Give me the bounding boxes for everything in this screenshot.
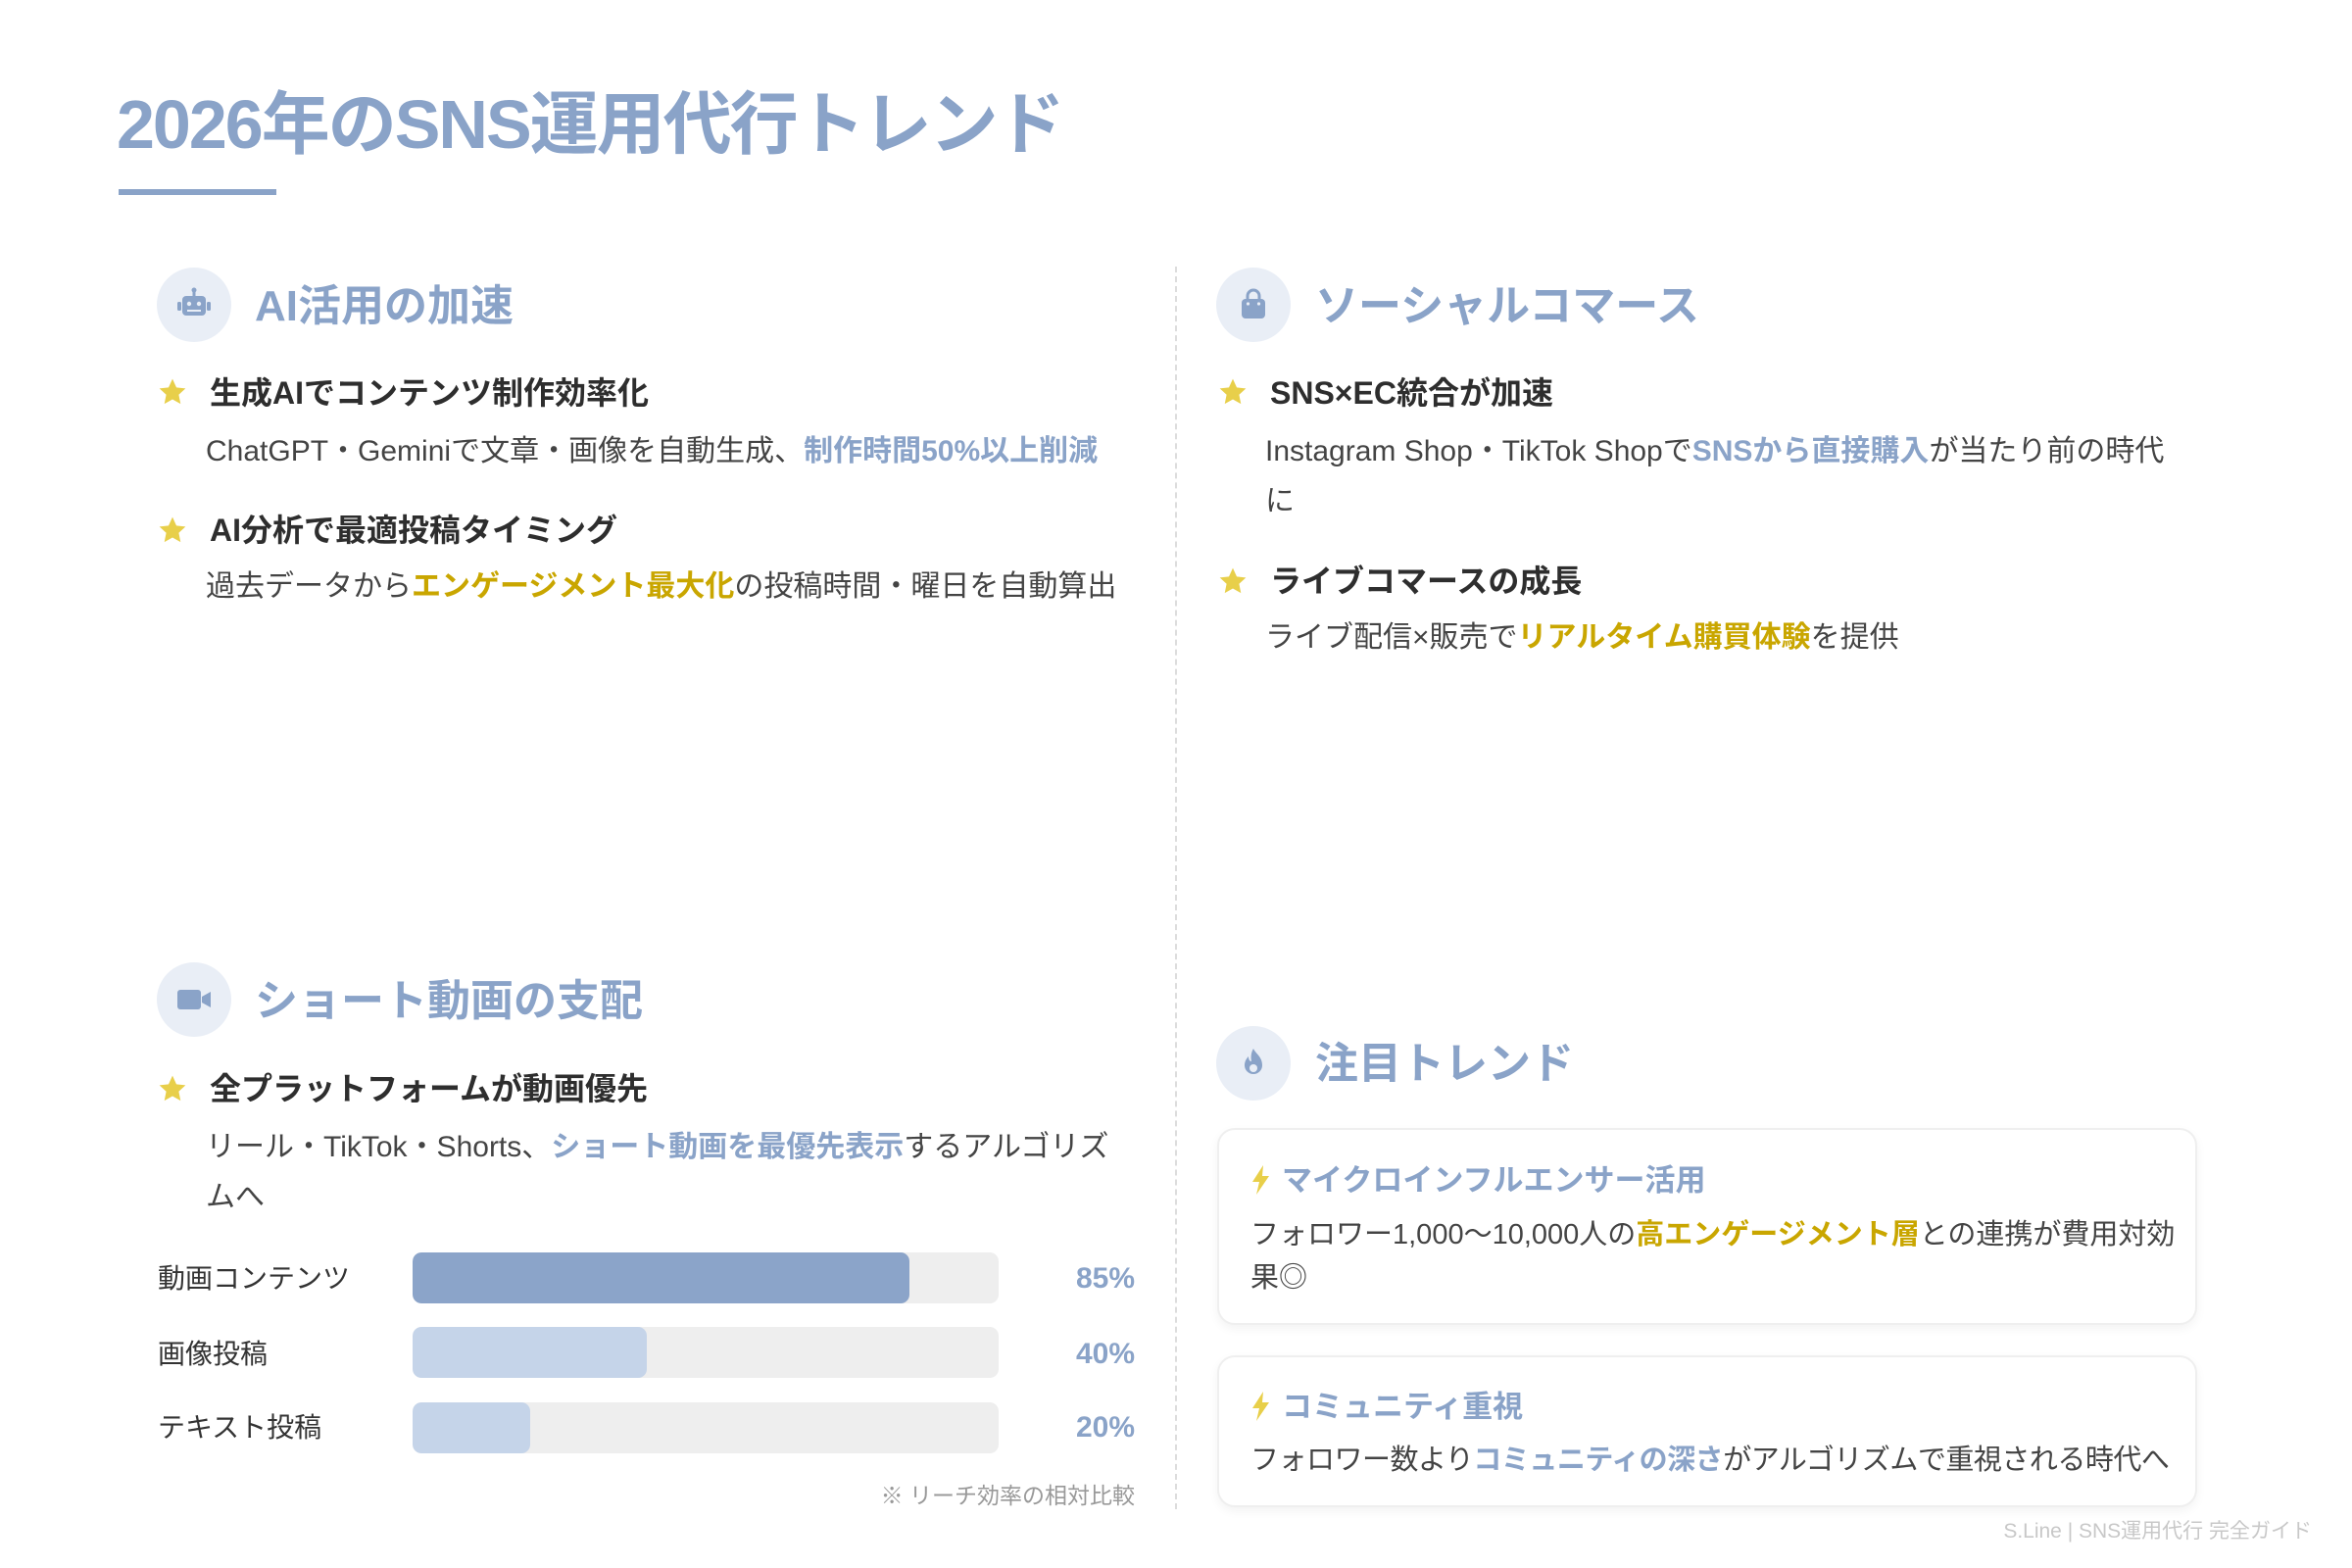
icon: star	[159, 1076, 186, 1102]
panel: trends	[1216, 1026, 1574, 1101]
icon: video camera	[157, 962, 231, 1037]
card desc: 果◎	[1250, 1262, 1307, 1294]
desc	[1265, 435, 2164, 517]
desc	[206, 1131, 1108, 1213]
bar chart: 20%	[1076, 1411, 1135, 1444]
title: 2026年のSNS運用代行トレンド	[117, 86, 1063, 163]
card: micro influencer	[1217, 1128, 2197, 1325]
heading: AI活用の加速	[255, 282, 514, 330]
bar chart: テキスト投稿	[158, 1412, 321, 1443]
bar chart: 85%	[1076, 1262, 1135, 1295]
item title: 生成AIでコンテンツ制作効率化	[210, 375, 649, 411]
bar chart: 40%	[1076, 1338, 1135, 1370]
bar chart: 動画コンテンツ	[158, 1263, 350, 1294]
icon: bag	[1216, 268, 1291, 342]
heading: ソーシャルコマース	[1315, 282, 1699, 330]
heading: 注目トレンド	[1315, 1040, 1574, 1088]
card desc: フォロワー1,000〜10,000人の高エンゲージメント層との連携が費用対効	[1250, 1219, 2175, 1250]
item title: AI分析で最適投稿タイミング	[210, 513, 617, 548]
card desc	[1250, 1219, 2175, 1294]
item title: SNS×EC統合が加速	[1270, 375, 1553, 411]
icon: star	[1219, 378, 1247, 404]
desc: 過去データからエンゲージメント最大化の投稿時間・曜日を自動算出	[206, 570, 1116, 603]
panel: social commerce	[1216, 268, 2164, 654]
heading: ショート動画の支配	[255, 977, 643, 1025]
icon: star	[159, 517, 186, 543]
card: community	[1217, 1355, 2197, 1507]
icon: star	[159, 378, 186, 404]
panel: short video	[157, 962, 1108, 1213]
desc: Instagram Shop・TikTok ShopでSNSから直接購入が当たり前の時代	[1265, 435, 2164, 467]
bar chart	[158, 1252, 1135, 1508]
card title: マイクロインフルエンサー活用	[1282, 1163, 1705, 1198]
desc: リール・TikTok・Shorts、ショート動画を最優先表示するアルゴリズ	[206, 1131, 1108, 1163]
desc: に	[1265, 485, 1295, 517]
item title: ライブコマースの成長	[1270, 564, 1582, 599]
desc: ライブ配信×販売でリアルタイム購買体験を提供	[1265, 621, 1899, 654]
note: ※ リーチ効率の相対比較	[881, 1483, 1135, 1508]
card title: コミュニティ重視	[1282, 1390, 1523, 1424]
desc: ムへ	[206, 1181, 265, 1213]
card desc: フォロワー数よりコミュニティの深さがアルゴリズムで重視される時代へ	[1250, 1445, 2169, 1476]
footer: S.Line | SNS運用代行 完全ガイド	[2003, 1520, 2312, 1543]
panel: AI	[157, 268, 1116, 603]
item title: 全プラットフォームが動画優先	[210, 1071, 648, 1106]
icon: flame	[1216, 1026, 1291, 1101]
bar chart: 画像投稿	[158, 1339, 268, 1369]
desc: ChatGPT・Geminiで文章・画像を自動生成、制作時間50%以上削減	[206, 435, 1098, 467]
icon: robot	[157, 268, 231, 342]
icon: star	[1219, 568, 1247, 594]
